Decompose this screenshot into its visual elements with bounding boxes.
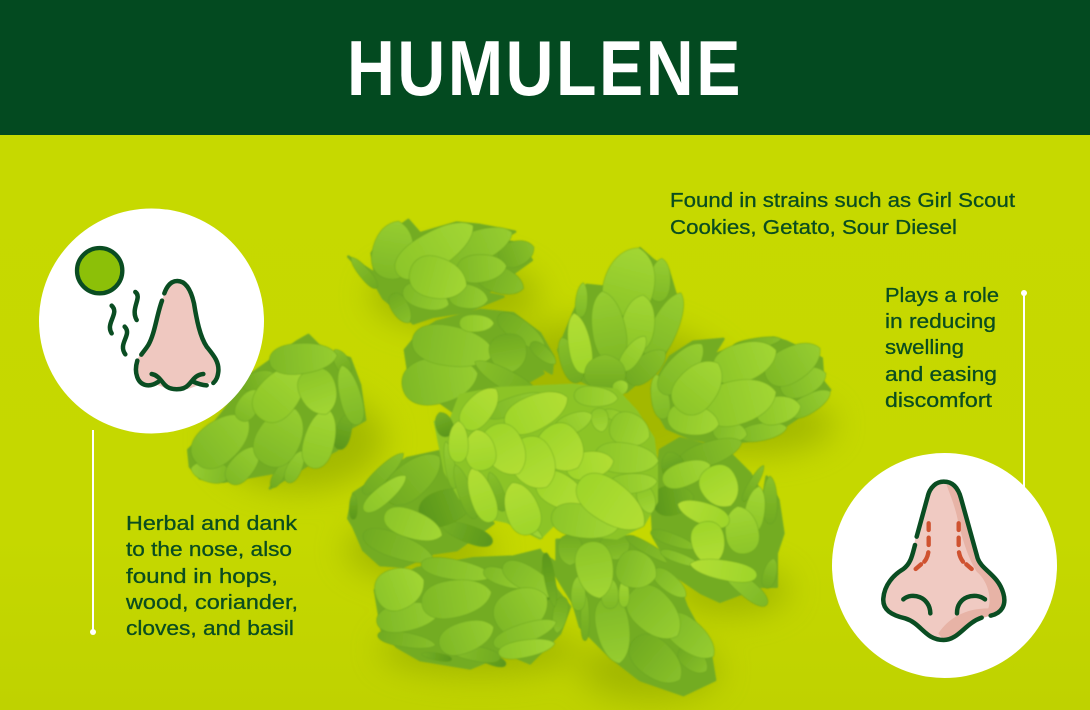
hop: top	[347, 210, 538, 327]
icon: smelling nose	[39, 208, 264, 434]
text: aroma: to the nose, also	[126, 539, 292, 561]
text: aroma: wood, coriander,	[125, 592, 298, 614]
text: benefits: swelling	[885, 337, 964, 359]
text: benefits: Plays a role	[885, 285, 999, 307]
hop shadows	[215, 260, 835, 700]
text: aroma: found in hops,	[126, 566, 278, 588]
text: aroma: cloves, and basil	[126, 618, 294, 640]
hop: lower left	[348, 443, 495, 571]
connector line: left	[90, 430, 96, 635]
text: benefits	[885, 285, 999, 412]
text: aroma: Herbal and dank	[126, 513, 298, 535]
icon: swollen nose	[832, 453, 1057, 678]
hop cones	[182, 210, 835, 695]
text: aroma	[125, 513, 298, 640]
hop: lower right	[649, 430, 783, 611]
header band	[0, 0, 1090, 135]
hop: bottom left	[369, 550, 570, 670]
hop: bottom	[540, 531, 723, 695]
hop: right	[647, 332, 835, 445]
hop: upper right	[552, 241, 693, 398]
connector line: right	[1021, 290, 1027, 488]
title: HUMULENE	[347, 24, 743, 112]
text: benefits: discomfort	[885, 390, 993, 412]
text: strains: Cookies, Getato, Sour Diesel	[670, 217, 957, 239]
hop: left	[182, 335, 368, 490]
text: benefits: in reducing	[885, 311, 996, 333]
text: strains	[670, 190, 1015, 239]
hop: middle top	[398, 307, 560, 417]
text: benefits: and easing	[885, 364, 997, 386]
hop: centre	[432, 380, 660, 544]
text: strains: Found in strains such as Girl Scout	[670, 190, 1015, 212]
